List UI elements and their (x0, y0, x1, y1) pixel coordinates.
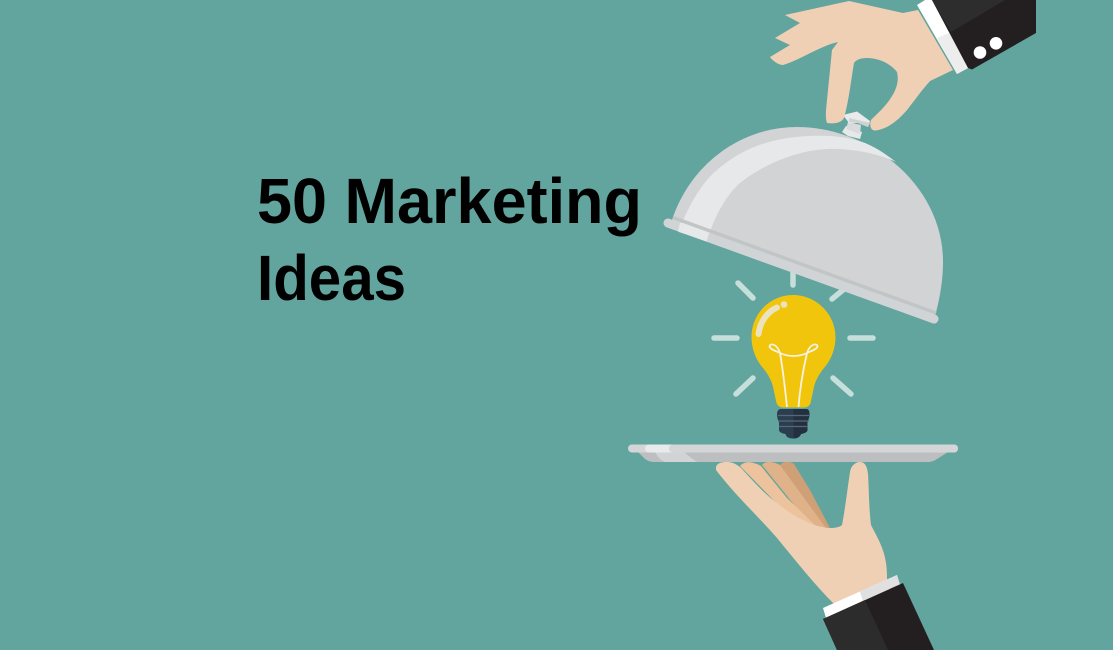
title: 50 Marketing (257, 165, 642, 237)
icon: light bulb (752, 295, 836, 438)
icon: cloche dome (668, 127, 943, 319)
icon: cloche handle (842, 112, 870, 139)
icon: upper hand (770, 0, 1036, 131)
icon: light rays (714, 272, 873, 394)
title: Ideas (257, 242, 406, 314)
icon: serving tray (628, 444, 958, 462)
title (257, 165, 642, 314)
icon: lower hand (716, 462, 934, 650)
